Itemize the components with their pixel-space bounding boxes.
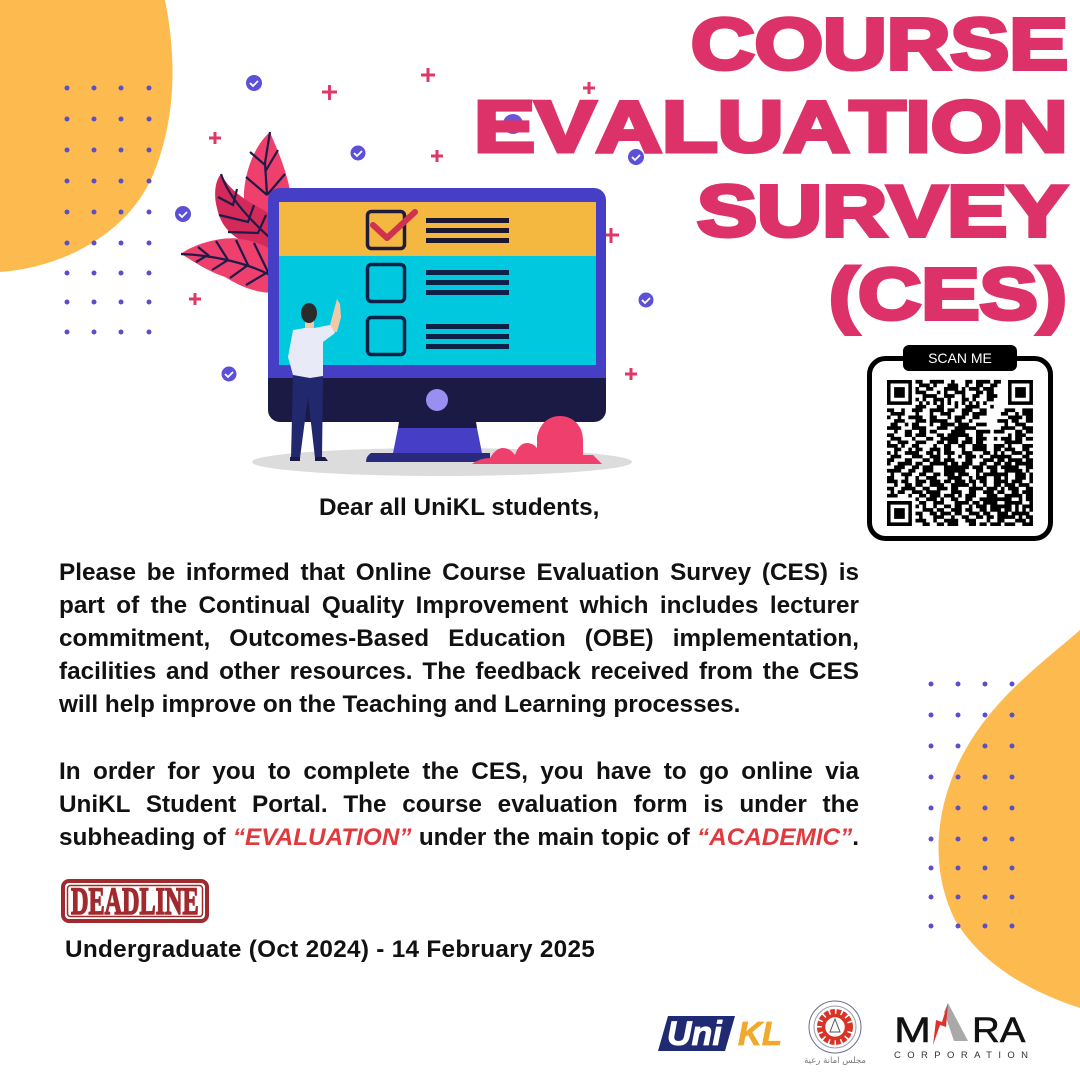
dot grid: top-left: [64, 86, 152, 334]
label: scan me: [903, 345, 1017, 371]
dot grid: bottom-right: [928, 682, 1014, 928]
text: paragraph two: In order for you to complete the CES, you have to go online via: [59, 758, 859, 785]
text: greeting: Dear all UniKL students,: [319, 494, 599, 521]
logo: MARA seal: مجلس امانة رعية: [804, 1056, 866, 1066]
shadow: [252, 448, 632, 476]
logo: UniKL: [658, 1015, 782, 1053]
text: paragraph two: UniKL Student Portal. The course evaluation form is under the: [59, 791, 859, 818]
blob: bottom-right yellow: [939, 630, 1080, 1008]
text: paragraph one: part of the Continual Quality Improvement which includes lecturer: [59, 592, 859, 619]
QR pattern: [887, 380, 1033, 526]
text: deadline date: Undergraduate (Oct 2024) - 14 February 2025: [65, 936, 595, 963]
logo: UniKL: Uni: [667, 1015, 723, 1053]
logo: deadline stamp: DEADLINE: [71, 880, 199, 924]
text: paragraph two: [59, 758, 860, 851]
person: [288, 299, 341, 461]
QR code card: [870, 345, 1050, 538]
logo: MARA Corporation: M: [894, 1011, 931, 1050]
text: paragraph one: [59, 559, 859, 718]
icons: check badges: [175, 75, 654, 382]
logo: MARA Corporation: RA: [972, 1011, 1026, 1050]
title: SURVEY: [697, 172, 1067, 252]
illustration: computer survey scene: [175, 68, 654, 476]
text: paragraph two: subheading of “EVALUATION” under the main topic of “ACADEMIC”.: [59, 824, 859, 851]
bush: [472, 416, 602, 464]
title: COURSE: [691, 5, 1068, 85]
logo: UniKL: KL: [738, 1015, 782, 1052]
blob: top-left yellow: [0, 0, 173, 272]
title: (CES): [829, 254, 1067, 334]
text: paragraph one: Please be informed that Online Course Evaluation Survey (CES) is: [59, 559, 859, 586]
title: [474, 5, 1068, 334]
text: paragraph one: commitment, Outcomes-Based Education (OBE) implementation,: [59, 625, 859, 652]
screen: survey form: [279, 202, 596, 365]
monitor: [268, 188, 606, 462]
icons: plus signs: [189, 68, 637, 380]
label: scan me: SCAN ME: [928, 350, 992, 366]
text: paragraph one: facilities and other resources. The feedback received from the CES: [59, 658, 859, 685]
leaves: [181, 132, 290, 293]
logo: MARA seal: [804, 1001, 866, 1066]
text: paragraph one: will help improve on the Teaching and Learning processes.: [59, 691, 740, 718]
logo: MARA Corporation: CORPORATION: [894, 1050, 1028, 1061]
logo: MARA Corporation: [894, 1003, 1028, 1061]
title: EVALUATION: [474, 88, 1068, 167]
